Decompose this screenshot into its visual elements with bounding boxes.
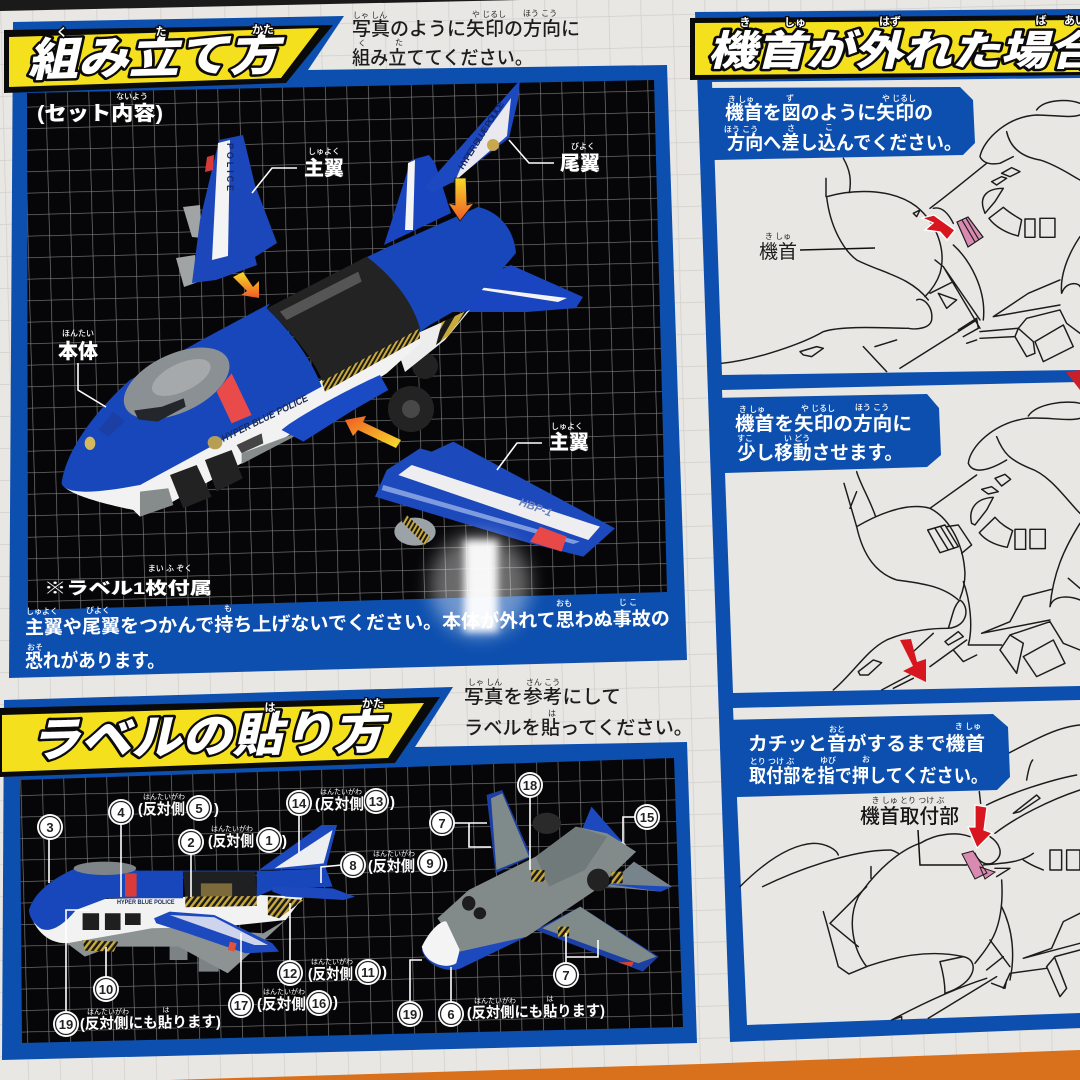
header instruction text: ほう こう bbox=[523, 9, 557, 18]
callout: step 2: 機首を矢印の方向に bbox=[735, 412, 912, 435]
badge 6 bbox=[438, 1001, 464, 1027]
opposite-side notes: (反対側にも貼ります) bbox=[467, 1002, 605, 1022]
opposite-side notes: はんたいがわ bbox=[263, 987, 305, 996]
warning text: じ こ bbox=[619, 598, 637, 607]
header instruction text: た bbox=[395, 38, 403, 47]
opposite-side notes: ) bbox=[382, 964, 387, 981]
side logo text: HYPER BLUE POLICE bbox=[117, 899, 175, 906]
header instruction text: く bbox=[358, 39, 366, 48]
nose badge bbox=[85, 437, 95, 450]
blue nose rim bbox=[422, 937, 527, 970]
set contents label: ないよう bbox=[116, 91, 148, 101]
nose hatch bbox=[98, 412, 125, 437]
step 1 white area bbox=[712, 78, 1080, 375]
callout: step 2: 少し移動させます。 bbox=[737, 442, 903, 464]
badge 8 bbox=[340, 852, 366, 878]
callout: step 2: や じるし bbox=[801, 404, 835, 413]
plane: separate left wing: POLICE bbox=[225, 143, 235, 191]
warning text: 恐れがあります。 bbox=[25, 649, 165, 672]
vents bbox=[83, 913, 141, 930]
badge 13: 13 bbox=[369, 794, 383, 809]
callout: step 1: ほう こう bbox=[724, 124, 758, 134]
label note: まい ふ ぞく bbox=[148, 564, 192, 573]
callout: step 2: ほう こう bbox=[855, 402, 889, 412]
badge 12 bbox=[277, 960, 303, 986]
title banner bbox=[4, 23, 333, 93]
badge 17 bbox=[228, 992, 254, 1018]
warning text: びよく bbox=[86, 605, 110, 615]
opposite-side notes: はんたいがわ bbox=[143, 792, 185, 801]
title furigana bbox=[56, 23, 274, 39]
wheels bbox=[533, 813, 561, 834]
opposite-side notes: (反対側 bbox=[315, 795, 364, 813]
callout: step 1: き しゅ bbox=[728, 95, 754, 104]
opposite-side notes: はんたいがわ bbox=[211, 824, 253, 833]
badge 19 left bbox=[53, 1011, 79, 1037]
title furigana: く bbox=[56, 27, 68, 39]
badge 11 bbox=[355, 959, 381, 985]
badge 8: 8 bbox=[349, 858, 357, 873]
icon: pink nose lock step 1 bbox=[957, 217, 983, 247]
badge 14 bbox=[286, 790, 312, 816]
plane: tail stabilizer bbox=[446, 265, 583, 312]
badge 16: 16 bbox=[312, 996, 326, 1011]
title furigana: た bbox=[156, 25, 166, 38]
fuselage wheels bbox=[587, 869, 609, 891]
header instruction text: しゃ しん bbox=[353, 11, 387, 20]
badge 19 right bbox=[397, 1001, 423, 1027]
label leader lines bbox=[49, 793, 636, 1015]
badge 9 bbox=[417, 850, 443, 876]
red stripe bbox=[125, 873, 137, 897]
label: body: ほんたい bbox=[62, 329, 94, 338]
badge 4: 4 bbox=[117, 805, 125, 820]
label: tail wing: びよく bbox=[571, 141, 595, 151]
label: main wing lower: 主翼 bbox=[549, 430, 589, 454]
blue forward fuselage bbox=[62, 303, 322, 492]
panel blue frame bbox=[2, 687, 697, 1060]
badge 11: 11 bbox=[361, 965, 375, 980]
vents bbox=[170, 433, 263, 508]
warning text: も bbox=[224, 604, 232, 613]
arrow: red step 3 bbox=[968, 805, 992, 848]
label: body bbox=[58, 329, 106, 407]
top dark edge bbox=[0, 0, 520, 11]
panel blue frame bbox=[9, 16, 687, 678]
opposite-side notes: は bbox=[546, 995, 554, 1003]
header instruction text bbox=[464, 678, 693, 739]
title text: 組み立て方 bbox=[26, 28, 289, 86]
title furigana bbox=[264, 697, 384, 714]
label: nose mount bbox=[860, 796, 967, 865]
arrow: red step 2 bbox=[900, 639, 926, 682]
wing white stripe bbox=[398, 465, 600, 540]
plane: separate left wing bbox=[176, 135, 277, 287]
step 2 white area bbox=[722, 382, 1080, 693]
plane: rear hazard stripes bbox=[436, 310, 468, 345]
label: main wing upper: 主翼 bbox=[304, 156, 344, 180]
callout: step 3: ゆび bbox=[820, 755, 836, 765]
wing red patch bbox=[530, 527, 567, 552]
number badges bbox=[37, 772, 660, 1037]
badge 17: 17 bbox=[234, 998, 248, 1013]
black grid photo area bbox=[20, 758, 683, 1043]
badge 7 top: 7 bbox=[438, 816, 446, 831]
grey lower belly bbox=[140, 427, 313, 517]
title furigana: はず bbox=[879, 14, 901, 28]
warning text: しゅよく bbox=[26, 607, 58, 616]
label: main wing lower: しゅよく bbox=[551, 422, 583, 431]
panel blue frame bbox=[695, 9, 1080, 1042]
title text: ラベルの貼り方 bbox=[28, 706, 393, 768]
opposite-side notes: はんたいがわ bbox=[87, 1007, 129, 1016]
plane: separate tail fin bbox=[424, 80, 520, 192]
panel: label application bbox=[0, 678, 697, 1060]
callout: step 1: さ bbox=[787, 124, 795, 133]
hazard stripe on black section bbox=[322, 328, 420, 392]
white nose bbox=[422, 921, 460, 966]
hazard details bbox=[531, 870, 623, 937]
badge 10 bbox=[93, 976, 119, 1002]
upper wing bbox=[487, 790, 531, 873]
red corner mark bbox=[1066, 370, 1080, 390]
white underside bbox=[62, 328, 420, 517]
white fuselage bbox=[29, 895, 304, 943]
arrow: lower wing to body bbox=[345, 416, 401, 448]
callout: step 3: き しゅ bbox=[955, 722, 981, 731]
badge 7 bottom bbox=[553, 962, 579, 988]
header instruction text: は bbox=[548, 709, 556, 718]
line art: step 1 bbox=[722, 101, 1080, 372]
callout: step 3: おと bbox=[829, 725, 845, 734]
badge 12: 12 bbox=[283, 966, 297, 981]
set contents label: (セット内容) bbox=[37, 101, 163, 125]
opposite-side notes: (反対側 bbox=[257, 995, 306, 1013]
opposite-side notes: ) bbox=[390, 794, 395, 811]
arrow: red step 1 bbox=[922, 215, 955, 240]
badge 15 bbox=[634, 804, 660, 830]
grey belly bbox=[67, 920, 286, 973]
warning text bbox=[25, 598, 670, 672]
tail stabilizer bbox=[607, 862, 672, 892]
title banner bbox=[0, 697, 440, 777]
red stripe bbox=[217, 373, 252, 423]
badge 19 left: 19 bbox=[59, 1017, 73, 1032]
label: main wing lower bbox=[497, 422, 589, 470]
label: body: 本体 bbox=[58, 340, 98, 363]
badge 7 top bbox=[429, 810, 455, 836]
grey fuselage bbox=[437, 827, 636, 963]
label: tail wing: 尾翼 bbox=[560, 153, 600, 175]
arrow: tail fin to body bbox=[448, 178, 474, 221]
callout: step 2: き しゅ bbox=[739, 405, 765, 414]
badge 5: 5 bbox=[195, 801, 203, 816]
plane: main body bbox=[62, 257, 420, 517]
badge 2: 2 bbox=[187, 835, 195, 850]
wing stub bbox=[282, 375, 388, 442]
glare reflection bbox=[430, 533, 530, 637]
badge 3: 3 bbox=[46, 820, 54, 835]
black mid section bbox=[267, 257, 420, 383]
callout: step 1: ず bbox=[786, 93, 794, 103]
badge 9: 9 bbox=[426, 856, 434, 871]
fuselage logo text: HYPER BLUE POLICE bbox=[220, 393, 310, 445]
callout: step 3: 取付部を指で押してください。 bbox=[749, 765, 988, 787]
canopy bbox=[113, 333, 240, 434]
header instruction text: ラベルを貼ってください。 bbox=[464, 717, 693, 739]
badge 6: 6 bbox=[447, 1007, 455, 1022]
lower wing bbox=[536, 907, 658, 972]
badge 16 bbox=[306, 990, 332, 1016]
label: nose bbox=[759, 232, 875, 263]
header instruction text bbox=[352, 9, 580, 69]
title furigana: は bbox=[264, 701, 276, 714]
opposite-side notes bbox=[80, 787, 605, 1033]
opposite-side notes: はんたいがわ bbox=[311, 957, 353, 966]
wing bbox=[154, 912, 279, 953]
badge 15: 15 bbox=[640, 810, 654, 825]
callout: step 3: カチッと音がするまで機首 bbox=[748, 732, 985, 755]
opposite-side notes: ) bbox=[333, 994, 338, 1011]
label: nose: 機首 bbox=[759, 241, 797, 263]
label: main wing upper: しゅよく bbox=[308, 147, 340, 156]
logo badge bbox=[208, 436, 222, 449]
badge 14: 14 bbox=[292, 796, 307, 811]
opposite-side notes: (反対側 bbox=[138, 800, 185, 818]
opposite-side notes: ) bbox=[214, 801, 219, 818]
wing lettering: HBP-1 bbox=[517, 497, 553, 519]
callout: step 2 bbox=[710, 394, 941, 474]
badge 4 bbox=[108, 799, 134, 825]
callout: step 3: お bbox=[862, 755, 870, 764]
title furigana: ば bbox=[1036, 13, 1046, 27]
opposite-side notes: はんたいがわ bbox=[474, 996, 516, 1005]
label: nose mount: き しゅ とり つけ ぶ bbox=[872, 796, 944, 805]
label: nose: き しゅ bbox=[765, 232, 791, 241]
badge 1 bbox=[256, 827, 282, 853]
step 3 white area bbox=[733, 700, 1080, 1025]
opposite-side notes: (反対側 bbox=[368, 857, 415, 875]
callout: step 1: 機首を図のように矢印の bbox=[725, 101, 933, 124]
header instruction text: 写真のように矢印の方向に bbox=[352, 18, 580, 40]
canopy bbox=[74, 862, 136, 875]
badge 13 bbox=[363, 788, 389, 814]
warning text: おも bbox=[556, 599, 572, 608]
warning text: 主翼や尾翼をつかんで持ち上げないでください。本体が外れて思わぬ事故の bbox=[25, 607, 670, 639]
badge 18 bbox=[517, 772, 543, 798]
black grid photo area bbox=[27, 80, 667, 610]
header instruction text: しゃ しん bbox=[468, 678, 502, 687]
callout: step 1: こ bbox=[825, 123, 833, 132]
tail fin bbox=[580, 807, 629, 853]
header instruction text: や じるし bbox=[472, 10, 506, 19]
badge 18: 18 bbox=[523, 778, 537, 793]
opposite-side notes: ) bbox=[443, 856, 448, 873]
title furigana: しゅ bbox=[784, 16, 806, 29]
panel: when the nose comes off bbox=[690, 9, 1080, 1042]
callout: step 1 bbox=[699, 87, 975, 160]
title furigana bbox=[740, 13, 1080, 29]
title furigana: かた bbox=[252, 23, 274, 36]
callout: step 3 bbox=[722, 714, 1010, 798]
engine pod bbox=[394, 515, 436, 546]
opposite-side notes: はんたいがわ bbox=[373, 849, 415, 858]
title furigana: き bbox=[740, 16, 750, 29]
title text: 機首が外れた場合 bbox=[706, 28, 1080, 74]
badge 3 bbox=[37, 814, 63, 840]
callout: step 3: とり つけ ぶ bbox=[750, 757, 794, 766]
opposite-side notes: ) bbox=[282, 833, 287, 850]
plane: rear white belly bbox=[396, 310, 470, 372]
callout: step 2: すこ bbox=[737, 434, 753, 443]
badge 5 bbox=[186, 795, 212, 821]
opposite-side notes: は bbox=[162, 1006, 170, 1014]
opposite-side notes: (反対側 bbox=[308, 965, 353, 983]
line art: step 3 bbox=[740, 725, 1080, 1020]
panel: assembly instructions bbox=[4, 9, 687, 678]
label: main wing upper bbox=[252, 147, 344, 193]
tail fin bbox=[259, 825, 337, 870]
plane: separate tail fin: HYPER BLUE POLICE bbox=[456, 100, 506, 171]
wing surface bbox=[375, 442, 615, 557]
label: tail wing bbox=[509, 140, 600, 175]
label note: ※ラベル1枚付属 bbox=[44, 578, 212, 598]
plane: wheels bbox=[388, 353, 438, 432]
opposite-side notes: (反対側 bbox=[208, 832, 254, 850]
header instruction text: 写真を参考にして bbox=[464, 686, 621, 708]
callout: step 1: や じるし bbox=[882, 94, 916, 103]
line art: step 2 bbox=[833, 402, 1080, 690]
header instruction text: さん こう bbox=[526, 678, 560, 687]
hazard markings bbox=[83, 896, 304, 952]
set contents label bbox=[37, 91, 163, 125]
callout: step 2: い どう bbox=[784, 433, 810, 443]
light reflection on black section bbox=[280, 272, 362, 320]
plane: rear fuselage bbox=[367, 207, 516, 332]
arrow: wing to body left bbox=[233, 272, 259, 298]
blue upper fuselage bbox=[29, 863, 333, 930]
plane: underside view bbox=[422, 790, 672, 972]
open cargo bay bbox=[183, 872, 257, 898]
badge 19 right: 19 bbox=[403, 1007, 417, 1022]
title banner bbox=[690, 13, 1080, 80]
warning text: おそ bbox=[27, 643, 43, 652]
callout: step 1: 方向へ差し込んでください。 bbox=[727, 131, 962, 154]
plane: side view bbox=[29, 825, 355, 973]
label note bbox=[44, 564, 212, 598]
stabilizer bbox=[272, 887, 355, 900]
wing secondary stripe bbox=[382, 485, 580, 544]
title furigana: かた bbox=[362, 697, 384, 710]
badge 7 bottom: 7 bbox=[562, 968, 570, 983]
badge 1: 1 bbox=[265, 833, 273, 848]
engine pods bbox=[170, 940, 219, 972]
icon: pink nose lock step 3 bbox=[962, 851, 995, 879]
orange bottom strip bbox=[170, 1050, 1080, 1080]
plane: separate lower wing bbox=[375, 442, 615, 557]
header instruction text: 組み立ててください。 bbox=[352, 47, 533, 69]
opposite-side notes: はんたいがわ bbox=[320, 787, 362, 796]
badge 10: 10 bbox=[99, 982, 113, 997]
plane: vertical tail base bbox=[384, 155, 451, 245]
opposite-side notes: (反対側にも貼ります) bbox=[80, 1013, 221, 1033]
label: nose mount: 機首取付部 bbox=[860, 805, 959, 828]
badge 2 bbox=[178, 829, 204, 855]
